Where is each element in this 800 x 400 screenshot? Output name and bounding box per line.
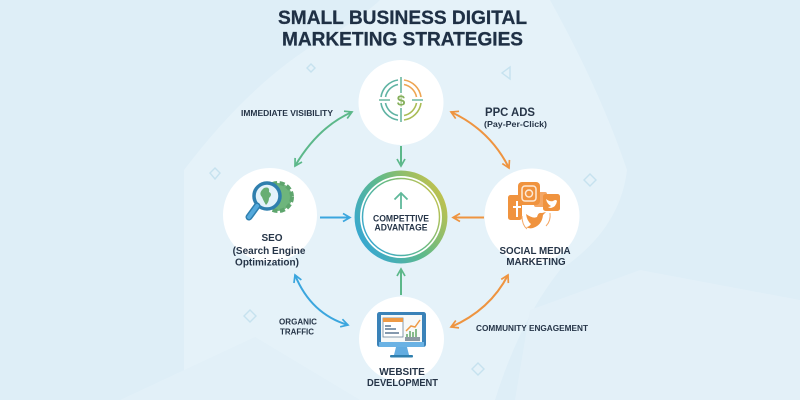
label: organic traffic: ORGANIC [279,316,317,326]
node: competitive advantage: COMPETTIVE [373,214,429,224]
label: organic traffic [279,316,317,336]
title: SMALL BUSINESS DIGITAL [278,7,527,29]
arrow: top to center [400,146,402,166]
icon: magnifier and gear [249,183,292,217]
icon: dollar target: $ [397,92,406,110]
node: SEO: Optimization) [235,258,299,268]
label: PPC ads: PPC ADS [485,107,535,119]
label: PPC ads: (Pay-Per-Click) [484,119,547,129]
node: website development: WEBSITE [379,367,425,378]
node: SEO: SEO [261,233,283,244]
label: immediate visibility: IMMEDIATE VISIBILITY [241,108,333,118]
node: website development: DEVELOPMENT [367,378,438,389]
arrow: website to center [400,269,402,295]
label: organic traffic: TRAFFIC [280,326,314,336]
node: SEO [223,168,317,268]
arrow: SEO to center [320,216,350,218]
node: social media marketing: MARKETING [506,257,566,268]
node: social media marketing: SOCIAL MEDIA [499,246,571,257]
label: PPC ads [484,107,547,129]
node: competitive advantage [357,173,445,261]
node: competitive advantage: ADVANTAGE [374,222,428,232]
arrow: community engagement curve [451,275,508,327]
node: social media marketing [484,168,580,268]
node: PPC target [358,60,444,145]
node: SEO: (Search Engine [233,246,306,257]
arrow: organic traffic curve [295,275,348,325]
title: MARKETING STRATEGIES [282,28,523,50]
arrow: immediate visibility curve [295,112,352,166]
icon: social media cluster [508,182,560,229]
node: website development [359,296,444,389]
label: community engagement: COMMUNITY ENGAGEMENT [476,323,589,333]
arrow: PPC to social curve [451,112,509,168]
icon: monitor [377,312,426,358]
title [278,7,527,50]
arrow: social to center [453,216,484,218]
